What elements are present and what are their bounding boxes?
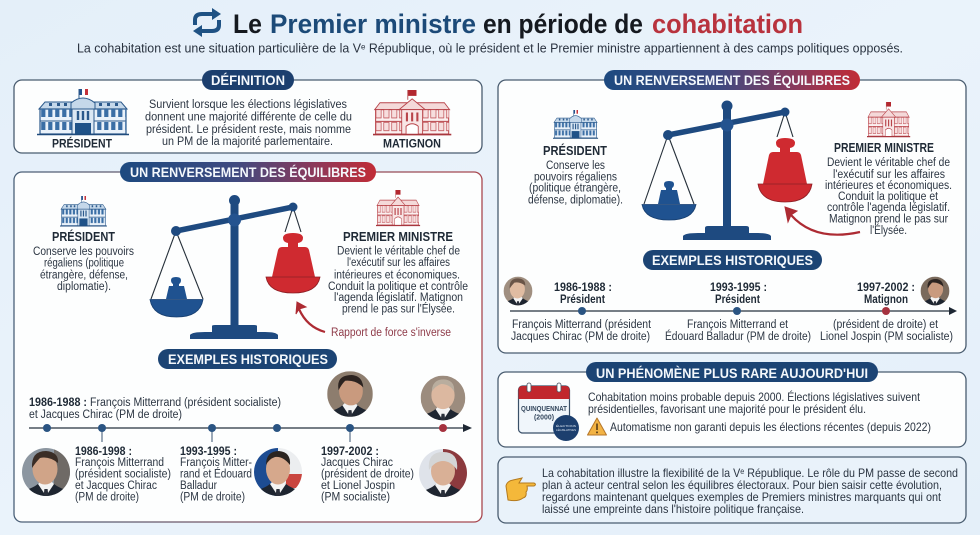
text: 1993-1995: 1993-1995 :: [180, 444, 237, 458]
icon: hôtel de Matignon: [373, 90, 451, 135]
block: premier ministre: prend le pas sur l'Élysée.: [342, 302, 455, 316]
text: 1993-1995: [180, 444, 252, 504]
period: 1993-1995: François Mitterrand et: [687, 319, 789, 331]
intro: 1986-1988: et Jacques Chirac (PM de droite): [29, 409, 182, 421]
text: quinquennat: présidentielles, favorisant une majorité pour le président élu.: [588, 402, 866, 416]
portrait: Lionel Jospin: [419, 449, 467, 497]
period: 1986-1988: Président: [560, 292, 605, 306]
subtitle: République, où le président et le Premier ministre appartiennent à des camps politiques opposés.: [365, 42, 903, 56]
block: président: défense, diplomatie).: [528, 194, 623, 206]
block: président: diplomatie).: [57, 281, 111, 293]
portrait: petit Chirac: [921, 277, 949, 305]
text: 1997-2002: [321, 444, 414, 504]
title: cohabitation: [652, 9, 803, 39]
block: premier ministre: intérieures et économiques.: [825, 180, 952, 192]
period: 1986-1988: Jacques Chirac (PM de droite): [511, 331, 650, 343]
warning text: Automatisme non garanti depuis les élections récentes (depuis 2022): [610, 420, 931, 434]
weight: président: [658, 181, 680, 204]
chart: balance: [642, 100, 812, 240]
text: 1993-1995: (PM de droite): [180, 492, 245, 504]
timeline: [510, 307, 957, 315]
text: 1993-1995: Balladur: [180, 480, 217, 492]
period: 1997-2002: Lionel Jospin (PM socialiste): [820, 331, 953, 343]
period: 1986-1988: [511, 280, 652, 343]
block: premier ministre: PREMIER MINISTRE: [834, 141, 934, 155]
portrait: François Mitterrand: [22, 448, 70, 496]
title: en période de: [483, 9, 643, 39]
icon: petit Matignon: [867, 102, 910, 137]
caption: rapport de force: Rapport de force s'inverse: [331, 327, 451, 339]
block: président: PRÉSIDENT: [52, 229, 115, 244]
heading: définition: DÉFINITION: [211, 73, 285, 88]
block: premier ministre: [328, 230, 468, 316]
text: 1986-1998: (PM de droite): [75, 492, 139, 504]
weight: premier ministre: [272, 233, 315, 277]
intro: 1986-1988: 1986-1988 :: [29, 395, 87, 409]
text: 1986-1998: François Mitterrand: [75, 457, 164, 469]
text: 1997-2002: Jacques Chirac: [321, 457, 393, 469]
icon: petit Matignon: [376, 190, 420, 225]
block: président: PRÉSIDENT: [543, 143, 607, 158]
text: quinquennat: [588, 389, 921, 416]
pan: premier ministre: [758, 184, 812, 202]
block: premier ministre: Matignon prend le pas sur: [829, 214, 948, 226]
label: président: PRÉSIDENT: [52, 138, 112, 150]
title: Le: [233, 9, 262, 39]
panel: un phénomène plus rare: [498, 362, 966, 447]
text: 1986-1998: [75, 444, 171, 504]
portrait: Édouard Balladur: [254, 448, 302, 496]
block: président: (politique étrangère,: [529, 182, 621, 194]
pan: premier ministre: [266, 277, 320, 293]
title: Premier ministre: [270, 9, 476, 39]
block: président: [528, 143, 623, 206]
period: 1997-2002: [820, 280, 953, 343]
block: président: Conserve les pouvoirs: [33, 246, 134, 258]
panel: un renversement des équilibres (gauche): [14, 162, 482, 522]
heading: exemples historiques: EXEMPLES HISTORIQUES: [652, 253, 813, 268]
text: conclusion: regardons maintenant quelques exemples de Premiers ministres marquants qui ont: [542, 490, 942, 504]
icon: avertissement: [588, 418, 606, 435]
pan: président: [150, 300, 203, 317]
text: conclusion: [542, 466, 958, 516]
text: 1997-2002: et Lionel Jospin: [321, 480, 395, 492]
block: premier ministre: l'exécutif sur les affaires: [833, 169, 945, 181]
text: 1986-1998: (président socialiste): [75, 468, 171, 480]
title: [233, 9, 803, 39]
text: conclusion: e: [740, 467, 745, 476]
heading: définition: [202, 70, 294, 90]
block: premier ministre: intérieures et économiques.: [334, 270, 460, 282]
heading: un renversement des équilibres: UN RENVERSEMENT DES ÉQUILIBRES: [614, 73, 850, 88]
arrow: rapport de force: [296, 302, 325, 332]
panel: conclusion: [498, 457, 966, 523]
text: conclusion: La cohabitation illustre la flexibilité de la V: [542, 466, 764, 480]
portrait: Jacques Chirac: [327, 371, 373, 417]
definition text: [145, 99, 352, 148]
timeline: [29, 424, 472, 442]
icon: palais de l'Élysée: [37, 89, 129, 134]
icon: main pointant: [506, 478, 536, 501]
period: 1993-1995: Édouard Balladur (PM de droite): [665, 330, 811, 343]
text: conclusion: plan à acteur central selon les équilibres électoraux. Pour bien saisir cette évolution,: [542, 478, 942, 492]
period: 1986-1988: François Mitterrand (président: [512, 319, 652, 331]
icon: calendrier quinquennat: (2000): [534, 414, 554, 422]
text: 1997-2002: (président de droite): [321, 468, 414, 480]
heading: un phénomène plus rare: UN PHÉNOMÈNE PLUS RARE AUJOURD'HUI: [596, 365, 868, 381]
block: président: étrangère, défense,: [40, 270, 128, 282]
text: quinquennat: Cohabitation moins probable depuis 2000. Élections législatives suivent: [588, 389, 921, 404]
definition text: donnent une majorité différente de celle du: [145, 112, 352, 124]
block: président: régaliens (politique: [44, 258, 124, 270]
block: premier ministre: l'Élysée.: [870, 224, 907, 237]
label: matignon: MATIGNON: [383, 138, 441, 150]
definition text: un PM de la majorité parlementaire.: [162, 136, 333, 148]
text: conclusion: laissé une empreinte dans l'histoire politique française.: [542, 502, 804, 516]
text: 1986-1998: et Jacques Chirac: [75, 480, 157, 492]
arrow: rapport de force: [785, 207, 860, 235]
period: 1997-2002: 1997-2002 :: [857, 280, 915, 294]
block: premier ministre: [825, 141, 952, 237]
pan: président: [642, 204, 696, 220]
portrait: Lionel Jospin haut: [421, 376, 465, 420]
heading: exemples historiques: EXEMPLES HISTORIQUES: [168, 352, 328, 367]
text: 1997-2002: (PM socialiste): [321, 492, 390, 504]
portrait: petit Mitterrand: [504, 277, 532, 305]
heading: un renversement des équilibres: UN RENVERSEMENT DES ÉQUILIBRES: [130, 165, 366, 180]
period: 1993-1995: Président: [715, 292, 760, 306]
subtitle: La cohabitation est une situation particulière de la V: [77, 42, 363, 56]
period: 1993-1995: [665, 280, 811, 343]
block: premier ministre: contrôle l'agenda législatif.: [827, 202, 950, 214]
text: 1993-1995: François Mitter-: [180, 457, 252, 469]
definition text: président. Le président reste, mais nomme: [146, 124, 351, 136]
weight: président: [166, 277, 187, 299]
subtitle: e: [361, 42, 366, 52]
text: 1986-1998: 1986-1998 :: [75, 444, 132, 458]
block: président: Conserve les: [546, 160, 605, 172]
block: président: pouvoirs régaliens: [534, 172, 617, 184]
block: premier ministre: PREMIER MINISTRE: [343, 230, 453, 244]
icon: petit Élysée: [553, 110, 598, 138]
period: 1997-2002: Matignon: [864, 292, 908, 306]
block: premier ministre: Conduit la politique et contrôle: [328, 281, 468, 293]
intro: 1986-1988: François Mitterrand (président socialiste): [90, 397, 281, 409]
definition text: Survient lorsque les élections législatives: [149, 99, 347, 111]
block: premier ministre: l'exécutif sur les affaires: [347, 257, 450, 269]
panel: un renversement des équilibres (droite): [498, 70, 966, 353]
icon: petit Élysée: [60, 196, 107, 226]
intro: 1986-1988: [29, 395, 281, 421]
text: 1993-1995: rand et Édouard: [180, 468, 252, 480]
icon: calendrier quinquennat: [518, 383, 579, 441]
block: président: [33, 229, 134, 293]
period: 1986-1988: 1986-1988 :: [554, 280, 612, 294]
chart: balance: [150, 195, 320, 339]
period: 1993-1995: 1993-1995 :: [710, 280, 767, 294]
text: conclusion: République. Le rôle du PM passe de second: [744, 466, 958, 480]
block: premier ministre: Devient le véritable chef de: [827, 157, 950, 169]
weight: premier ministre: [763, 138, 807, 184]
block: premier ministre: Conduit la politique et: [838, 191, 939, 203]
text: 1997-2002: 1997-2002 :: [321, 444, 379, 458]
icon: calendrier quinquennat: QUINQUENNAT: [521, 406, 568, 413]
icon: calendrier quinquennat: ÉLECTIONS: [556, 423, 576, 428]
panel: définition: [14, 70, 482, 153]
period: 1997-2002: (président de droite) et: [833, 319, 939, 331]
icon: calendrier quinquennat: LÉGISLATIVES: [556, 427, 576, 432]
block: premier ministre: l'agenda législatif. Matignon: [334, 292, 463, 304]
block: premier ministre: Devient le véritable chef de: [337, 246, 460, 258]
icon: cohabitation arrows: [193, 8, 221, 37]
